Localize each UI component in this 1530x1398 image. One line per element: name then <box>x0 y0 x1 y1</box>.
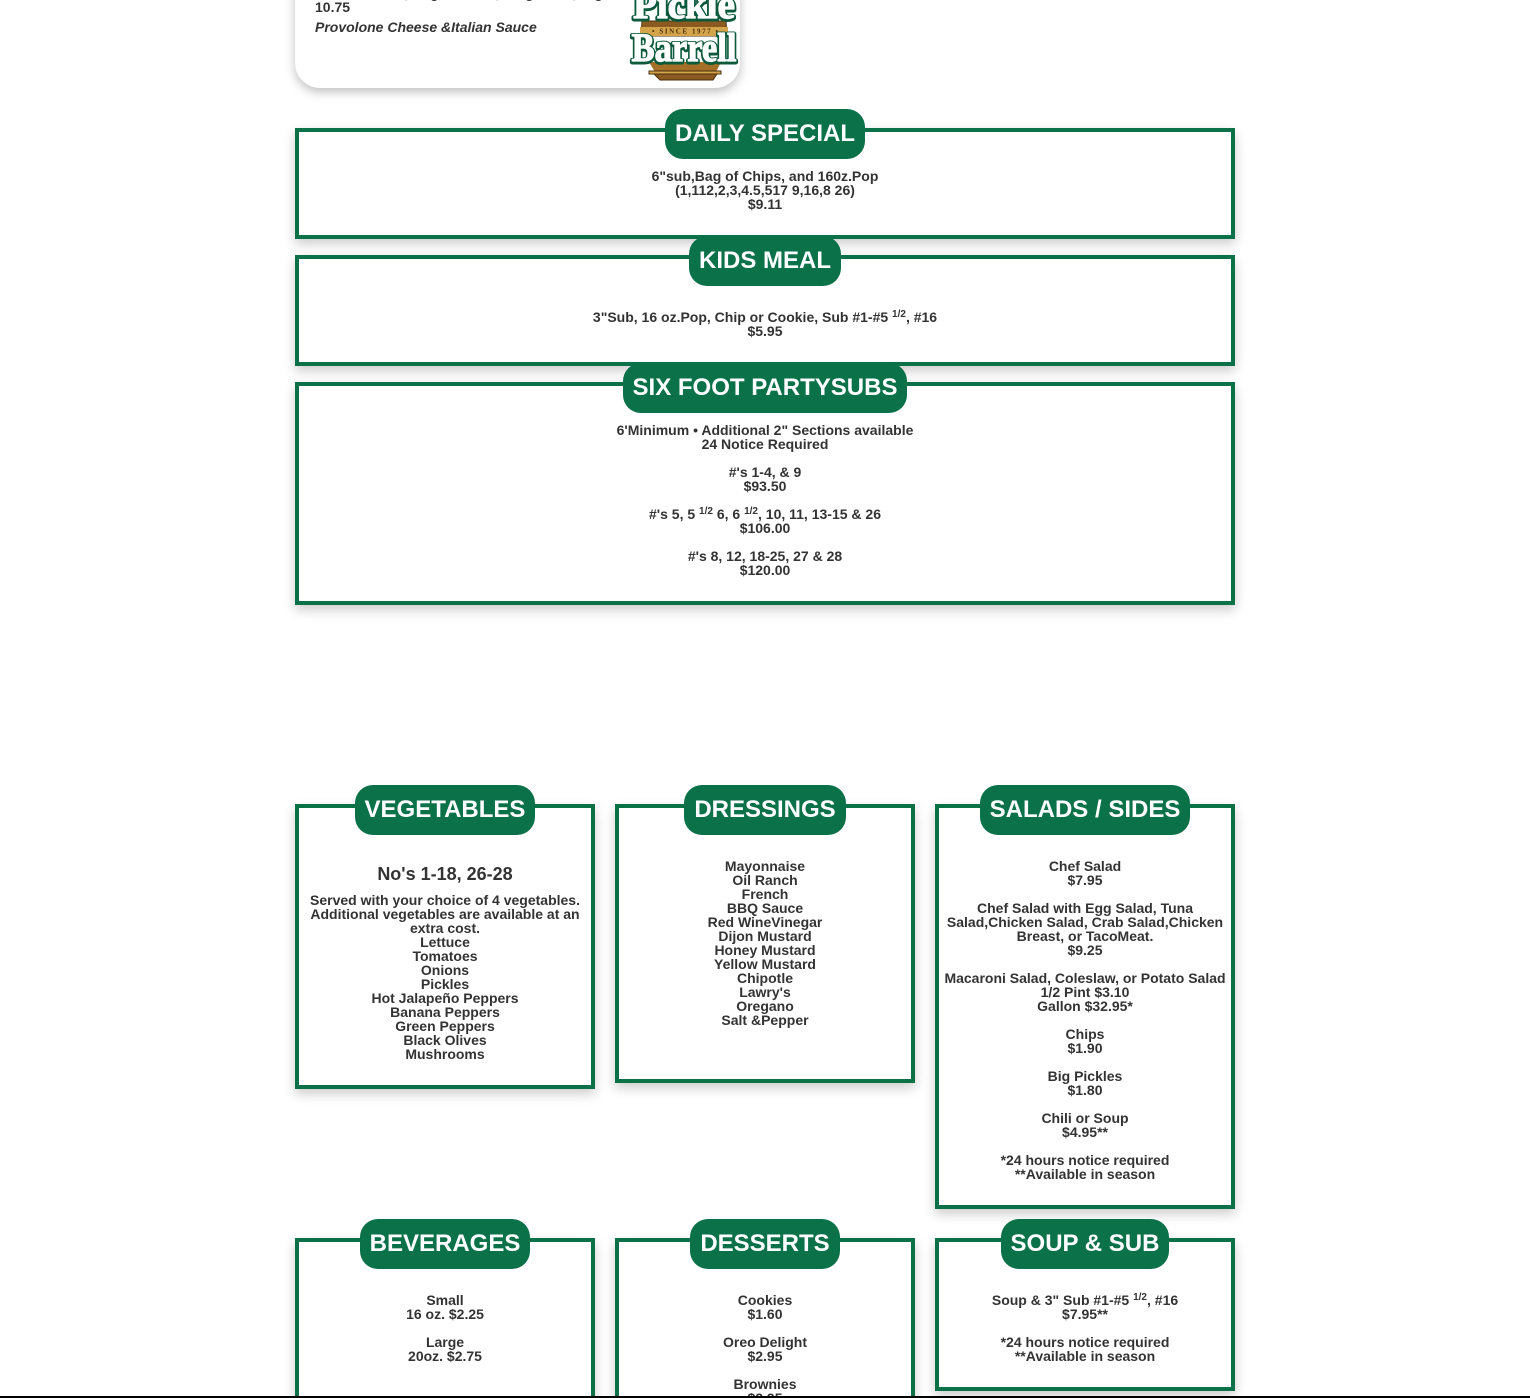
text: dressings list: Dijon Mustard <box>718 928 812 944</box>
text: salads list: Big Pickles <box>1048 1068 1122 1084</box>
text: sub price <box>315 0 603 15</box>
text: daily special: $9.11 <box>748 196 782 212</box>
text: daily special: (1,112,2,3,4.5,517 9,16,8 26) <box>675 182 855 198</box>
text: soup and sub: $7.95** <box>1062 1306 1108 1322</box>
text: vegetables list: Served with your choice of 4 vegetables. <box>310 892 580 908</box>
text: salads list <box>944 858 1226 1182</box>
text: party subs: 24 Notice Required <box>702 436 828 452</box>
text: party subs: $93.50 <box>744 478 786 494</box>
panel: top sub card <box>295 0 740 88</box>
text: dressings list: Chipotle <box>737 970 793 986</box>
text: party subs: 6'Minimum • Additional 2" Sections available <box>617 422 913 438</box>
text: desserts list: Brownies <box>733 1376 796 1392</box>
panel: dressings <box>615 804 915 1083</box>
panel: soup and sub <box>935 1238 1235 1391</box>
text: vegetables list: Onions <box>421 962 469 978</box>
heading: soup and sub: SOUP & SUB <box>1011 1230 1159 1257</box>
text: dressings list: Red WineVinegar <box>708 914 822 930</box>
text: dressings list <box>708 858 822 1028</box>
logo word: Barrell: Barrell <box>632 25 736 70</box>
text: dressings list: Lawry's <box>739 984 791 1000</box>
text: soup and sub: Soup & 3" Sub #1-#5 1/2, #16 <box>992 1292 1178 1308</box>
heading: salads and sides: SALADS / SIDES <box>990 796 1180 823</box>
heading: six foot party subs <box>623 363 907 413</box>
text: dressings list: BBQ Sauce <box>727 900 803 916</box>
text: beverages list <box>406 1292 484 1364</box>
text: party subs: #'s 5, 5 1/2 6, 6 1/2, 10, 11, 13-15 & 26 <box>649 506 881 522</box>
text: salads list: $1.90 <box>1067 1040 1103 1056</box>
text: dressings list: Honey Mustard <box>714 942 816 958</box>
text: desserts list: Cookies <box>738 1292 792 1308</box>
text: salads list: Chips <box>1066 1026 1104 1042</box>
text: vegetables list: extra cost. <box>410 920 480 936</box>
text: sub description: Provolone Cheese &Italian Sauce <box>315 19 537 35</box>
text: dressings list: Mayonnaise <box>725 858 805 874</box>
text: soup and sub: *24 hours notice required <box>1001 1334 1169 1350</box>
text: dressings list: Oregano <box>736 998 794 1014</box>
text: salads list: **Available in season <box>1015 1166 1155 1182</box>
text: beverages list: 16 oz. $2.25 <box>406 1306 484 1322</box>
text: dressings list: Oil Ranch <box>732 872 798 888</box>
text: kids meal: 3"Sub, 16 oz.Pop, Chip or Cookie, Sub #1-#5 1/2, #16 <box>593 309 937 325</box>
text: dressings list: Salt &Pepper <box>721 1012 809 1028</box>
text: kids meal: $5.95 <box>747 323 783 339</box>
heading: beverages: BEVERAGES <box>370 1230 520 1257</box>
text: vegetables list: Tomatoes <box>412 948 478 964</box>
panel: daily special <box>295 128 1235 239</box>
text: party subs: #'s 8, 12, 18-25, 27 & 28 <box>688 548 842 564</box>
text: salads list: Gallon $32.95* <box>1037 998 1133 1014</box>
panel: salads and sides <box>935 804 1235 1209</box>
heading: daily special <box>665 109 865 159</box>
text: daily special <box>652 168 878 212</box>
text: vegetables list: Lettuce <box>420 934 470 950</box>
text: soup and sub: **Available in season <box>1015 1348 1155 1364</box>
heading: daily special: DAILY SPECIAL <box>675 120 855 147</box>
text: salads list: Chef Salad <box>1049 858 1121 874</box>
text: beverages list: 20oz. $2.75 <box>408 1348 482 1364</box>
text: salads list: 1/2 Pint $3.10 <box>1041 984 1129 1000</box>
text: dressings list: French <box>742 886 788 902</box>
text: vegetables list: Mushrooms <box>405 1046 485 1062</box>
heading: kids meal: KIDS MEAL <box>699 247 831 274</box>
icon: Pickle Barrell logo: • SINCE 1977 • <box>652 28 719 36</box>
text: salads list: $9.25 <box>1067 942 1103 958</box>
heading: vegetables: VEGETABLES <box>365 796 525 823</box>
heading: kids meal <box>689 236 841 286</box>
logo word: Barrell: Barrell <box>632 26 736 71</box>
text: salads list: $7.95 <box>1067 872 1103 888</box>
text: vegetables list: Green Peppers <box>395 1018 495 1034</box>
heading: beverages <box>360 1219 530 1269</box>
text: vegetables list <box>310 892 580 1062</box>
text: vegetables subheading: No's 1-18, 26-28 <box>377 864 513 884</box>
text: desserts list: $2.95 <box>747 1348 783 1364</box>
text: salads list: Chef Salad with Egg Salad, Tuna <box>977 900 1193 916</box>
text: vegetables list: Black Olives <box>403 1032 487 1048</box>
text: soup and sub <box>992 1292 1178 1364</box>
text: vegetables list: Banana Peppers <box>390 1004 500 1020</box>
text: beverages list: Small <box>426 1292 464 1308</box>
text: salads list: Macaroni Salad, Coleslaw, or Potato Salad <box>944 970 1226 986</box>
text: vegetables list: Pickles <box>421 976 469 992</box>
text: salads list: Salad,Chicken Salad, Crab Salad,Chicken <box>947 914 1223 930</box>
heading: desserts <box>690 1219 840 1269</box>
panel: kids meal <box>295 255 1235 366</box>
panel: beverages <box>295 1238 595 1398</box>
heading: salads and sides <box>980 785 1190 835</box>
text: salads list: $1.80 <box>1067 1082 1103 1098</box>
text: kids meal <box>593 309 937 339</box>
heading: soup and sub <box>1001 1219 1169 1269</box>
text: vegetables list: Additional vegetables are available at an <box>310 906 580 922</box>
text: dressings list: Yellow Mustard <box>714 956 816 972</box>
text: salads list: *24 hours notice required <box>1001 1152 1169 1168</box>
text: daily special: 6"sub,Bag of Chips, and 160z.Pop <box>652 168 878 184</box>
text: salads list: Breast, or TacoMeat. <box>1017 928 1153 944</box>
text: salads list: Chili or Soup <box>1041 1110 1129 1126</box>
panel: six foot party subs <box>295 382 1235 605</box>
text: vegetables list: Hot Jalapeño Peppers <box>371 990 519 1006</box>
icon: Pickle Barrell logo <box>630 0 738 80</box>
text: beverages list: Large <box>426 1334 464 1350</box>
heading: desserts: DESSERTS <box>700 1230 830 1257</box>
heading: vegetables <box>355 785 535 835</box>
heading: dressings <box>684 785 846 835</box>
text: party subs: $106.00 <box>740 520 790 536</box>
text: party subs: #'s 1-4, & 9 <box>729 464 801 480</box>
text: desserts list: $1.60 <box>747 1306 783 1322</box>
panel: vegetables <box>295 804 595 1089</box>
text: party subs: $120.00 <box>740 562 790 578</box>
text: desserts list <box>723 1292 807 1396</box>
text: party subs <box>617 422 913 578</box>
text: salads list: $4.95** <box>1062 1124 1108 1140</box>
text: desserts list: Oreo Delight <box>723 1334 807 1350</box>
panel: desserts <box>615 1238 915 1398</box>
heading: dressings: DRESSINGS <box>694 796 836 823</box>
bottom black bar <box>0 1396 1530 1398</box>
heading: six foot party subs: SIX FOOT PARTYSUBS <box>633 374 897 401</box>
